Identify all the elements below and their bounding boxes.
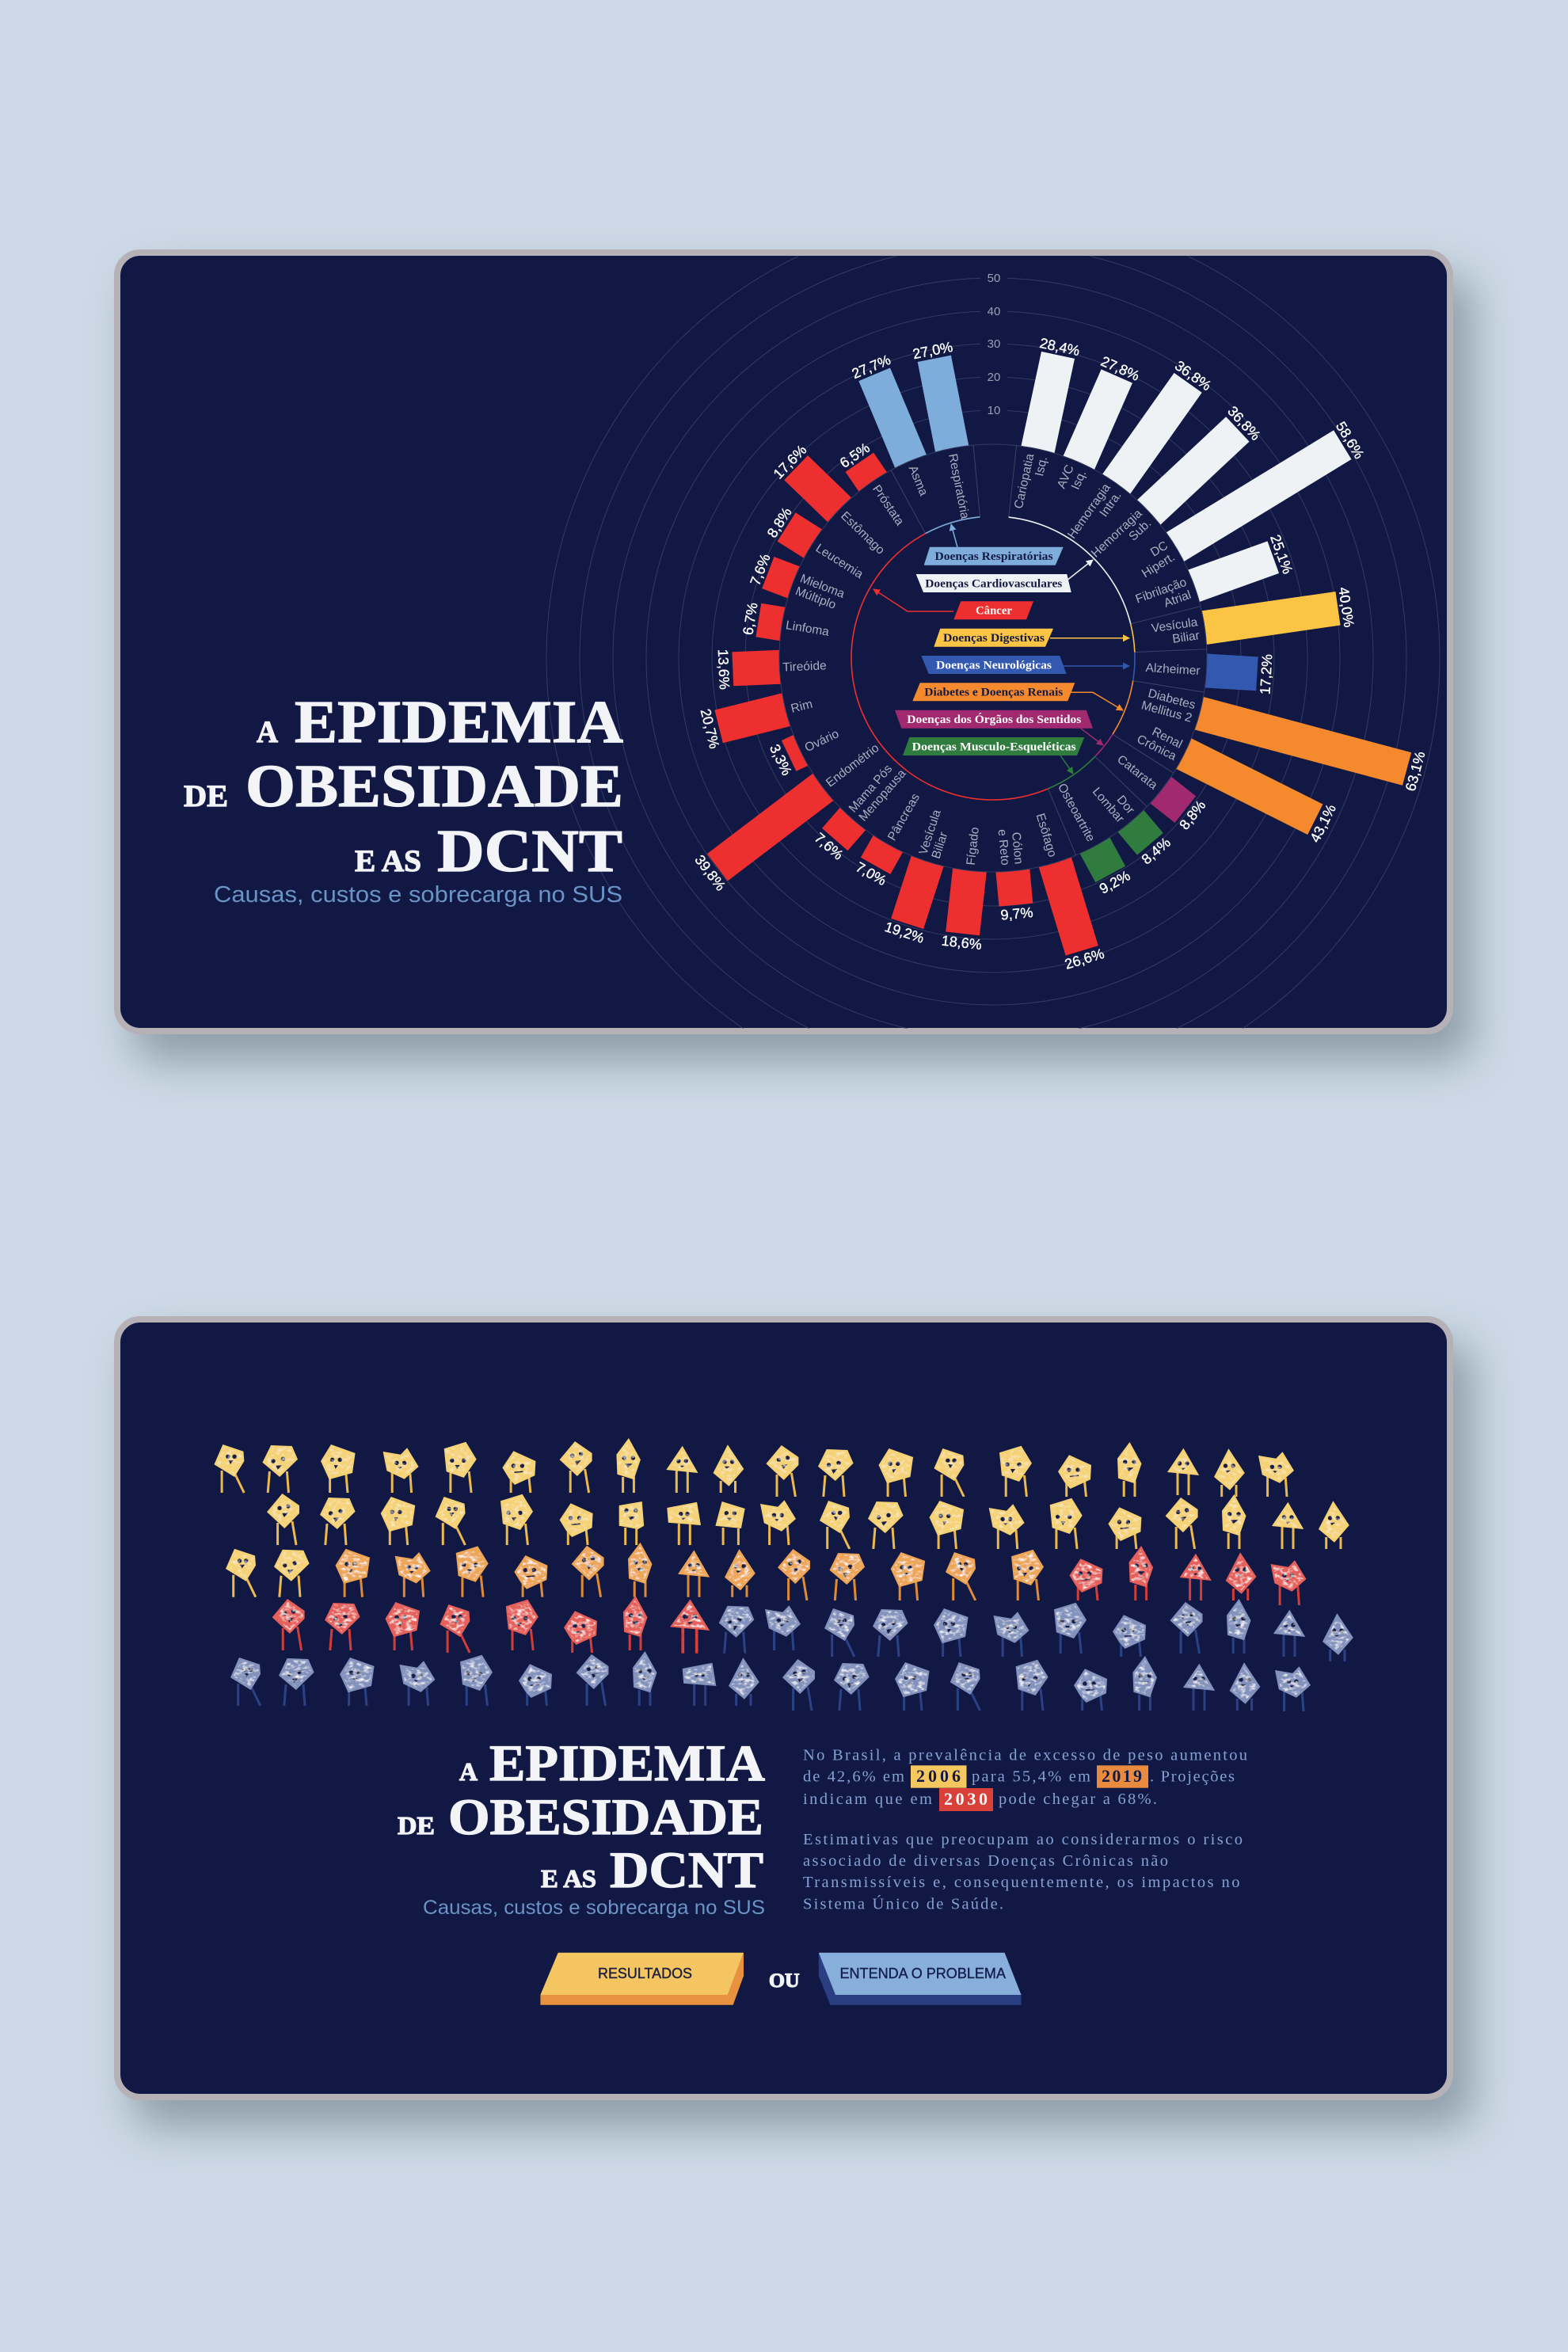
title: characters card: DE: [398, 1811, 435, 1840]
category labels: DC: [1148, 539, 1170, 560]
text block: second paragraph: Sistema Único de Saúde.: [803, 1894, 1003, 1913]
bar value labels: 8,8%: [1176, 797, 1208, 833]
text block: first paragraph: . Projeções: [1150, 1768, 1235, 1785]
bar value labels: 39,8%: [691, 852, 729, 894]
legend: Doenças Musculo-Esqueléticas: Doenças Musculo-Esqueléticas: [912, 740, 1076, 753]
text: ou: OU: [769, 1970, 800, 1992]
characters: row 1: [214, 1438, 1294, 1497]
category labels: Mellitus 2: [1140, 698, 1193, 725]
category labels: Biliar: [1171, 629, 1201, 646]
legend: Câncer: [953, 601, 1033, 619]
bar value labels: 36,8%: [1172, 357, 1214, 394]
text block: second paragraph: [803, 1831, 1243, 1913]
title: characters card: E AS: [541, 1864, 596, 1893]
category labels: Hipert.: [1140, 550, 1178, 580]
characters: row 2: [267, 1494, 1349, 1549]
bar value labels: 18,6%: [941, 933, 983, 953]
highlight: 2019: 2019: [1102, 1766, 1142, 1786]
legend: Doenças Neurológicas: [921, 656, 1067, 674]
category labels: Isq.: [1069, 468, 1089, 492]
title: chart card: OBESIDADE: [245, 753, 623, 820]
characters: row 4: [272, 1596, 1353, 1661]
bar value labels: 17,2%: [1257, 653, 1275, 695]
title: chart card: [184, 689, 623, 885]
category labels left half: Tireóide: [782, 659, 827, 675]
category labels left half: Vesícula: [916, 808, 944, 856]
category labels left half: Linfoma: [785, 618, 830, 639]
bar value labels: 26,6%: [1063, 946, 1106, 972]
legend: Doenças Digestivas: Doenças Digestivas: [943, 632, 1045, 645]
axis tick labels: 10: [988, 404, 1000, 417]
highlight: 2019: [1097, 1765, 1148, 1788]
legend: Doenças Respiratórias: [924, 547, 1064, 565]
category labels: Diabetes: [1147, 687, 1197, 712]
bar value labels: 43,1%: [1307, 801, 1339, 845]
axis tick labels: 40: [988, 305, 1000, 318]
subtitle: chart card: Causas, custos e sobrecarga no SUS: [214, 882, 622, 908]
bar value labels: 58,6%: [1333, 419, 1368, 462]
category labels left half: [782, 452, 982, 866]
category labels: Hemorragia: [1089, 507, 1145, 561]
category labels: Catarata: [1114, 752, 1160, 793]
bar value labels: 7,6%: [812, 830, 847, 863]
legend: Doenças Cardiovasculares: Doenças Cardiovasculares: [925, 578, 1062, 591]
category labels: Intra.: [1097, 489, 1125, 519]
category labels: e Reto: [995, 828, 1012, 866]
bar value labels: 9,7%: [1000, 904, 1033, 923]
category labels: Cariopatia: [1012, 452, 1037, 510]
title: chart card: EPIDEMIA: [295, 689, 623, 755]
category labels left half: Estômago: [838, 509, 887, 558]
title: chart card: DE: [184, 779, 228, 813]
bar value labels: 27,8%: [1098, 353, 1142, 384]
characters: row 3: [226, 1543, 1307, 1605]
title: characters card: [398, 1735, 765, 1899]
category labels: Vesícula: [1151, 615, 1199, 635]
legend: Doenças dos Órgãos dos Sentidos: [895, 710, 1093, 729]
highlight: 2006: 2006: [916, 1766, 961, 1786]
coloured inner arc: [851, 516, 1136, 801]
button: resultados: [540, 1953, 744, 2005]
inner ring mask: [779, 444, 1207, 872]
bar value labels: 25,1%: [1267, 533, 1296, 576]
axis tick labels: 20: [988, 371, 1000, 384]
bar value labels: 7,0%: [853, 859, 889, 889]
text block: first paragraph: de 42,6% em: [803, 1768, 904, 1785]
legend: Doenças Cardiovasculares: [916, 574, 1071, 592]
category labels left half: Múltiplo: [794, 584, 838, 612]
legend: Diabetes e Doenças Renais: Diabetes e Doenças Renais: [924, 686, 1063, 698]
category labels left half: Mieloma: [798, 572, 847, 601]
text block: second paragraph: Transmissíveis e, consequentemente, os impactos no: [803, 1874, 1240, 1891]
title: chart card: DCNT: [437, 818, 622, 885]
bar value labels: 13,6%: [715, 649, 733, 690]
bar value labels: 27,0%: [911, 339, 954, 362]
subtitle: characters card: Causas, custos e sobrecarga no SUS: [423, 1897, 765, 1919]
axis tick labels: 30: [988, 337, 1000, 351]
full page drawing layer: [184, 257, 1440, 2005]
text block: second paragraph: associado de diversas Doenças Crônicas não: [803, 1852, 1168, 1870]
bar value labels: 3,3%: [767, 742, 795, 778]
bar value labels: 19,2%: [883, 919, 926, 946]
category labels: Cólon: [1009, 832, 1026, 865]
legend: Diabetes e Doenças Renais: [912, 683, 1075, 701]
category labels: Osteoartrite: [1055, 782, 1098, 844]
category labels left half: Biliar: [930, 831, 950, 861]
bars: [707, 352, 1411, 956]
category labels: Renal: [1150, 725, 1185, 752]
legend: Doenças Musculo-Esqueléticas: [903, 737, 1084, 755]
category labels left half: Leucemia: [813, 542, 866, 581]
category labels left half: Rim: [790, 698, 814, 716]
category labels: Dor: [1114, 793, 1137, 816]
bar value labels: 40,0%: [1335, 586, 1357, 628]
category labels: Lombar: [1090, 785, 1127, 825]
bar value labels: 8,8%: [764, 504, 795, 540]
category labels: [995, 452, 1201, 866]
bar value labels: 17,6%: [771, 442, 809, 482]
panel: radial chart card: [114, 249, 1453, 1034]
title: chart card: A: [257, 715, 278, 749]
text block: second paragraph: Estimativas que preocupam ao considerarmos o risco: [803, 1831, 1243, 1848]
axis tick labels: [980, 271, 1007, 417]
category labels: Hemorragia: [1065, 481, 1113, 542]
characters: row 5: [230, 1651, 1311, 1711]
legend: Doenças Digestivas: [934, 629, 1053, 647]
button: entenda o problema: ENTENDA O PROBLEMA: [839, 1966, 1006, 1981]
category labels left half: Mama Pós: [847, 762, 895, 816]
text block: first paragraph: [803, 1747, 1247, 1811]
category labels: Esôfago: [1033, 812, 1059, 858]
legend: Doenças Neurológicas: Doenças Neurológicas: [936, 659, 1052, 672]
bar value labels: 9,2%: [1097, 867, 1132, 897]
category labels left half: Respiratória: [946, 452, 972, 520]
category labels: Fibrilação: [1134, 576, 1189, 606]
title: characters card: DCNT: [610, 1842, 763, 1899]
bar value labels: 20,7%: [698, 707, 722, 750]
text block: first paragraph: indicam que em: [803, 1791, 932, 1808]
title: characters card: OBESIDADE: [448, 1789, 763, 1846]
title: chart card: E AS: [355, 844, 421, 878]
bar value labels: 27,7%: [850, 352, 893, 382]
title: characters card: A: [459, 1757, 478, 1786]
category labels left half: Ovário: [803, 727, 841, 755]
title: characters card: EPIDEMIA: [489, 1735, 765, 1792]
panel: characters card: [114, 1316, 1453, 2100]
text block: first paragraph: No Brasil, a prevalência de excesso de peso aumentou: [803, 1747, 1247, 1764]
legend: arrows: [873, 524, 1129, 774]
bar value labels: 36,8%: [1224, 403, 1264, 443]
category labels: AVC: [1055, 462, 1077, 490]
category labels: Crônica: [1135, 733, 1178, 763]
legend: Doenças dos Órgãos dos Sentidos: Doenças dos Órgãos dos Sentidos: [907, 713, 1081, 726]
bar value labels: [691, 335, 1428, 972]
highlight: 2030: 2030: [944, 1789, 988, 1809]
bar value labels: 28,4%: [1038, 335, 1081, 359]
bar value labels: 6,7%: [740, 602, 761, 636]
category labels: Atrial: [1162, 588, 1193, 611]
highlight: 2030: [939, 1788, 993, 1811]
bar value labels: 63,1%: [1402, 750, 1428, 793]
bar value labels: 7,6%: [747, 552, 774, 588]
category labels left half: Menopausa: [856, 767, 909, 824]
category labels left half: Endométrio: [824, 741, 881, 790]
highlight: 2006: [911, 1765, 966, 1788]
radial bar chart: [546, 257, 1440, 1028]
axis tick labels: 50: [988, 272, 1000, 285]
category labels: Sub.: [1126, 516, 1154, 544]
category labels left half: Próstata: [870, 483, 907, 528]
category labels left half: Pâncreas: [885, 791, 923, 843]
category labels left half: Fígado: [965, 827, 982, 866]
text block: first paragraph: para 55,4% em: [972, 1768, 1090, 1785]
text block: first paragraph: pode chegar a 68%.: [999, 1791, 1157, 1808]
category labels: Isq.: [1033, 455, 1050, 478]
bar value labels: 6,5%: [837, 440, 873, 471]
legend: Câncer: Câncer: [976, 605, 1012, 618]
legend: Doenças Respiratórias: Doenças Respiratórias: [934, 550, 1053, 563]
button: resultados: RESULTADOS: [598, 1966, 692, 1981]
bar value labels: 8,4%: [1139, 835, 1174, 867]
category labels: Alzheimer: [1145, 661, 1201, 678]
category labels left half: Asma: [906, 463, 931, 498]
button: entenda o problema: [819, 1953, 1022, 2005]
